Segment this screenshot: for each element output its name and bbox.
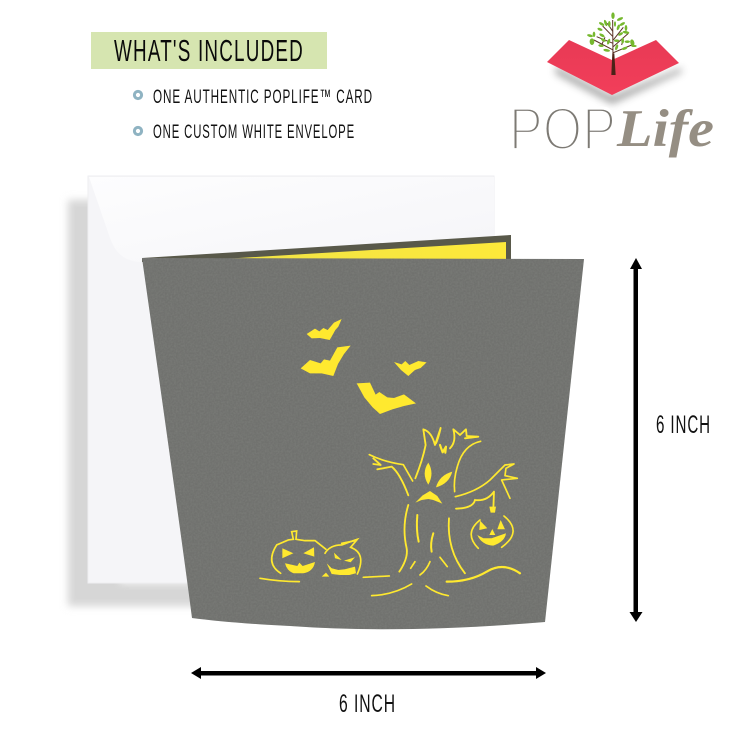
logo text: Life: Life xyxy=(616,100,714,158)
logo shadow xyxy=(555,66,682,104)
list item 2: ONE CUSTOM WHITE ENVELOPE xyxy=(153,121,355,143)
label: width: 6 INCH xyxy=(339,690,396,718)
pumpkin: left xyxy=(272,531,326,573)
envelope flap xyxy=(89,177,494,262)
bat 2 xyxy=(301,346,351,376)
bullet 2 xyxy=(134,127,142,135)
arrow: width dimension xyxy=(191,667,546,679)
card inner yellow xyxy=(205,242,506,261)
pumpkin: middle xyxy=(325,539,361,574)
list item 1: ONE AUTHENTIC POPLIFE™ CARD xyxy=(153,86,373,108)
envelope body xyxy=(88,176,494,583)
list: included items xyxy=(134,86,373,143)
panel: what's included heading xyxy=(91,32,327,69)
envelope xyxy=(68,176,494,606)
card: front xyxy=(142,258,584,629)
logo text: POP: POP xyxy=(509,96,616,162)
envelope shadow xyxy=(68,200,300,606)
bat 4 xyxy=(357,383,416,414)
pumpkin: hanging xyxy=(471,516,513,548)
logo: PopLife xyxy=(509,12,714,163)
tree xyxy=(260,428,520,596)
bullet 1 xyxy=(134,91,142,99)
artwork: bats, tree and pumpkins xyxy=(260,319,520,596)
heading background xyxy=(91,32,327,69)
logo: red open book xyxy=(547,40,679,95)
arrow: height dimension xyxy=(630,258,642,622)
card front shape xyxy=(142,258,584,629)
heading: what's included: WHAT'S INCLUDED xyxy=(114,33,304,68)
bat 3 xyxy=(394,361,427,376)
icon: tree xyxy=(587,12,637,75)
tree face xyxy=(425,463,431,485)
card back xyxy=(142,235,511,262)
bat 1 xyxy=(307,319,342,340)
card: back panel xyxy=(142,235,511,262)
